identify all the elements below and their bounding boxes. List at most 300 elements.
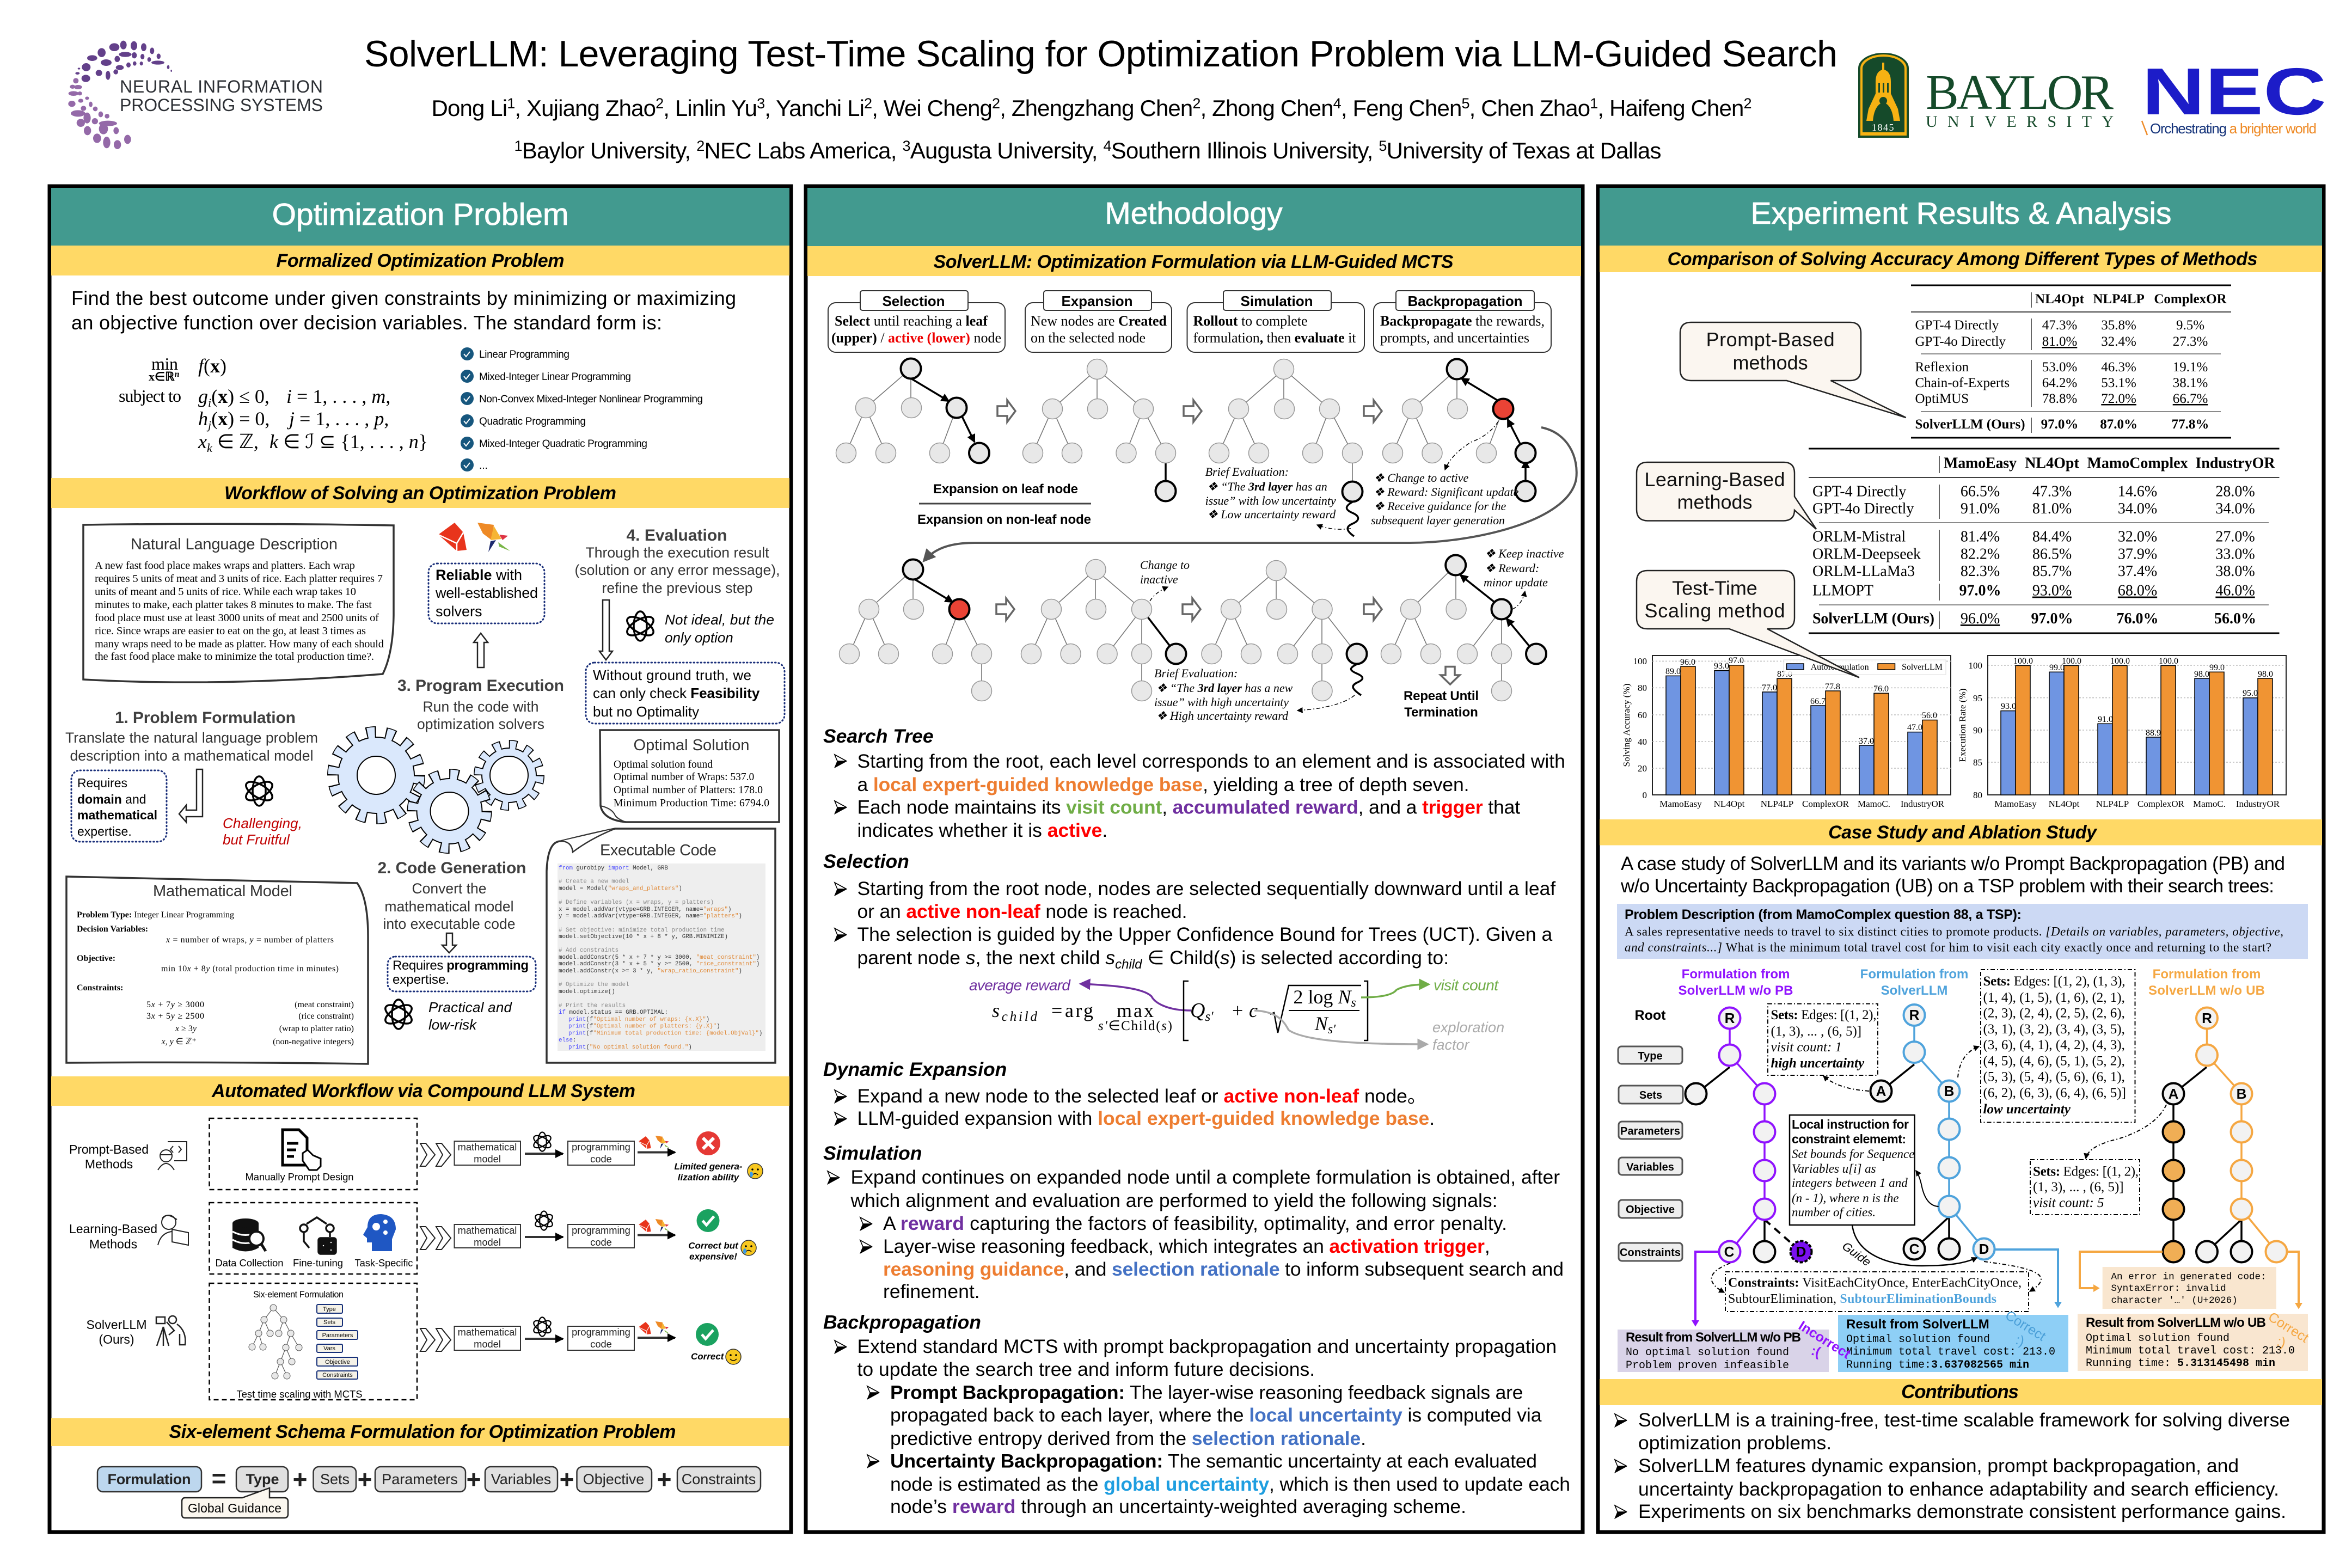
equation: UCT formula: 2 log N xyxy=(1293,986,1351,1008)
step card: simulation: formulation, then evaluate it xyxy=(1193,330,1356,346)
table: learning-based comparison: 34.0% xyxy=(2118,500,2157,517)
natural language box: minutes to make, each platter takes 8 minutes to make. The fast xyxy=(95,599,372,611)
formulation equation: Variables xyxy=(491,1471,551,1487)
mini element list: Sets xyxy=(323,1319,336,1326)
equation: UCT formula: N xyxy=(1315,1013,1328,1034)
table: learning-based comparison: GPT-4 Directly xyxy=(1812,483,1906,500)
table: prompt-based comparison: 35.8% xyxy=(2101,318,2136,333)
step card: expansion: New nodes are Created xyxy=(1031,313,1167,329)
note: challenging: Challenging, xyxy=(223,815,302,831)
authors: 2 xyxy=(656,95,664,112)
authors: Dong Li xyxy=(431,95,507,121)
icon: document hand xyxy=(283,1130,321,1170)
step card: selection xyxy=(828,291,1005,352)
step 4: evaluation: refine the previous step xyxy=(602,580,752,596)
bar chart: solving accuracy: MamoC. xyxy=(1858,799,1890,809)
mathematical model box: x = number of wraps, y = number of platters xyxy=(166,935,334,945)
bar chart: solving accuracy: 66.7 xyxy=(1810,697,1826,706)
authors: 2 xyxy=(1192,95,1200,112)
contributions list: optimization problems. xyxy=(1638,1432,1832,1454)
icon: data collection xyxy=(232,1218,266,1251)
equation: UCT formula: s xyxy=(992,1000,1000,1021)
table: learning-based comparison: 93.0% xyxy=(2032,583,2072,599)
step 4: evaluation: Through the execution result xyxy=(586,544,769,561)
pipeline row 3: code xyxy=(590,1338,612,1350)
authors: 5 xyxy=(1461,95,1469,112)
text: Search Tree xyxy=(823,725,1565,841)
authors: , Wei Cheng xyxy=(872,95,993,121)
mini element list xyxy=(317,1304,358,1379)
optimal solution box: Optimal number of Wraps: 537.0 xyxy=(614,771,754,783)
step 1: problem formulation: Translate the natural language problem xyxy=(65,730,318,746)
text: Dynamic Expansion: Expand a new node to the selected leaf or active non-leaf node。 xyxy=(857,1085,1426,1107)
code listing: # Define variables (x = wraps, y = platters) xyxy=(559,899,714,906)
text: Backpropagation: Backpropagation xyxy=(823,1312,981,1333)
mathematical model box: (non-negative integers) xyxy=(273,1037,354,1046)
authors: , Zhengzhang Chen xyxy=(1000,95,1193,121)
table: learning-based comparison: 47.3% xyxy=(2032,483,2072,500)
bar chart: solving accuracy: Solving Accuracy (%) xyxy=(1621,684,1632,767)
note: sets low uncertainty: (4, 5), (4, 6), (5, 1), (5, 2), xyxy=(1983,1054,2125,1068)
result: w/o UB: Optimal solution found xyxy=(2086,1332,2230,1345)
table: learning-based comparison: 84.4% xyxy=(2032,528,2072,546)
equation: standard form: ∈ ℤ, xyxy=(212,431,259,452)
arrow: code generation down xyxy=(442,933,456,953)
table: learning-based comparison: 34.0% xyxy=(2215,500,2255,517)
section bar: case study: Case Study and Ablation Study xyxy=(1828,822,2098,843)
callout: prompt-based methods: Prompt-Based xyxy=(1706,328,1835,351)
pipeline row 2 xyxy=(420,1209,756,1262)
result: w/o PB: No optimal solution found xyxy=(1626,1346,1789,1359)
table: learning-based comparison: 86.5% xyxy=(2032,546,2072,563)
note: brief evaluation high: ❖ High uncertainty reward xyxy=(1156,709,1289,722)
table: prompt-based comparison: 87.0% xyxy=(2100,417,2137,432)
text: Backpropagation: Prompt Backpropagation: The layer-wise reasoning feedback signals are xyxy=(890,1382,1523,1404)
table: learning-based comparison: 82.2% xyxy=(1961,546,2000,563)
problem description box: A sales representative needs to travel to six distinct cities to promote products. [Details on variables, parameters, objective, xyxy=(1625,924,2283,939)
pipeline row 2: code xyxy=(590,1236,612,1248)
checklist: problem types: Non-Convex Mixed-Integer Nonlinear Programming xyxy=(479,394,703,405)
formulation equation: + xyxy=(358,1465,372,1493)
step card: simulation: Rollout to complete xyxy=(1193,313,1308,329)
note: local instruction: integers between 1 and xyxy=(1792,1176,1908,1190)
note: brief evaluation low: Brief Evaluation: xyxy=(1205,465,1289,479)
text: Search Tree: a local expert-guided knowledge base, yielding a tree of depth seven. xyxy=(857,774,1469,795)
table: prompt-based comparison: 19.1% xyxy=(2173,360,2208,375)
code listing: # Create a new model xyxy=(559,879,629,885)
code listing: model.addConstr(3 * x + 5 * y >= 2500, "rice_constraint") xyxy=(559,961,759,967)
bar chart: execution rate: NL4Opt xyxy=(2049,799,2080,809)
bar chart: execution rate: 98.0 xyxy=(2194,670,2209,679)
label: repeat until termination: Termination xyxy=(1404,705,1478,720)
code listing: print(f"Minimum total production time: {model.ObjVal}") xyxy=(568,1031,762,1037)
note: brief evaluation low: ❖ Low uncertainty reward xyxy=(1207,507,1336,521)
text: Simulation: reasoning guidance, and selection rationale to inform subsequent search and xyxy=(883,1258,1564,1280)
level labels: Sets xyxy=(1639,1089,1662,1101)
section bar: formalized: Formalized Optimization Problem xyxy=(277,250,564,271)
equation: UCT formula: = xyxy=(1051,1000,1062,1021)
equation: UCT formula xyxy=(969,977,1504,1053)
logo: NEC xyxy=(2142,54,2326,137)
checklist: problem types: Mixed-Integer Quadratic Programming xyxy=(479,438,647,450)
note: not ideal: Not ideal, but the xyxy=(665,611,774,628)
title: SolverLLM: Leveraging Test-Time Scaling for Optimization Problem via LLM-Guided Search xyxy=(364,33,1837,75)
logo: NEC: Orchestrating a brighter world xyxy=(2150,120,2317,137)
logo: Baylor: 1845 xyxy=(1872,122,1895,133)
equation: standard form: x∈ℝ xyxy=(149,370,175,383)
note: sets high uncertainty: high uncertainty xyxy=(1771,1056,1865,1070)
code listing: model.optimize() xyxy=(559,989,615,995)
row: learning-based: Data Collection xyxy=(216,1257,283,1269)
note: sets low uncertainty: (3, 6), (4, 1), (4, 2), (4, 3), xyxy=(1983,1038,2125,1052)
stamp: correct blue: Correct xyxy=(2002,1308,2048,1344)
logo: NeurIPS xyxy=(68,41,323,149)
pipeline row 1: mathematical xyxy=(458,1141,517,1153)
tree: SolverLLM: C xyxy=(1909,1241,1920,1257)
table: learning-based comparison: 97.0% xyxy=(1959,583,2001,599)
executable code box: Executable Code xyxy=(600,842,716,859)
tree: second round simulation xyxy=(1202,561,1367,710)
contributions list xyxy=(1615,1409,2290,1522)
callout: feasibility: Without ground truth, we xyxy=(593,667,751,683)
callout: prompt-based methods xyxy=(1680,322,1906,418)
table: learning-based comparison: 81.0% xyxy=(2032,500,2072,517)
label: repeat until termination: Repeat Until xyxy=(1404,689,1479,703)
step card: backpropagation xyxy=(1374,291,1551,352)
note: local instruction: (n - 1), where n is the xyxy=(1792,1191,1899,1205)
panel heading: Experiment Results: Experiment Results & Analysis xyxy=(1751,196,2171,231)
note: change to active: ❖ Change to active xyxy=(1374,471,1469,485)
note: brief evaluation low: issue” with low uncertainty xyxy=(1205,494,1336,507)
table: prompt-based comparison: 97.0% xyxy=(2041,417,2078,432)
bar chart: execution rate: 88.9 xyxy=(2146,728,2161,738)
expansion labels: Expansion on leaf node xyxy=(933,482,1078,497)
table: prompt-based comparison: OptiMUS xyxy=(1915,391,1969,406)
note: sets low uncertainty: (6, 2), (6, 3), (6, 4), (6, 5)] xyxy=(1983,1086,2126,1100)
chart legend: SolverLLM xyxy=(1902,663,1943,672)
note: sets low uncertainty: (3, 1), (3, 2), (3, 4), (3, 5), xyxy=(1983,1022,2125,1037)
affiliations: Southern Illinois University, xyxy=(1111,138,1379,163)
note: brief evaluation high: issue” with high uncertainty xyxy=(1154,695,1289,709)
affiliations: 2 xyxy=(696,138,705,154)
authors: , Linlin Yu xyxy=(663,95,757,121)
section bar: automated workflow xyxy=(51,1076,789,1106)
equation: standard form: i xyxy=(208,396,211,409)
code listing: print("No optimal solution found.") xyxy=(568,1044,692,1051)
equation: standard form: g xyxy=(198,385,208,407)
pipeline row 1 xyxy=(420,1131,763,1183)
callout: learning-based methods: Learning-Based xyxy=(1644,468,1785,491)
authors: 2 xyxy=(992,95,1000,112)
mathematical model box: 5x + 7y ≥ 3000 xyxy=(146,1000,204,1009)
bar chart: execution rate: 85 xyxy=(1973,757,1982,768)
equation: standard form: min xyxy=(151,354,178,373)
authors: , Yanchi Li xyxy=(764,95,865,121)
callout: reliable xyxy=(428,564,544,623)
authors: , Feng Chen xyxy=(1341,95,1462,121)
table: learning-based comparison: IndustryOR xyxy=(2195,455,2275,471)
authors: , Xujiang Zhao xyxy=(514,95,656,121)
optimal solution box: Optimal Solution xyxy=(634,737,749,754)
step 1: problem formulation: 1. Problem Formulation xyxy=(115,709,296,727)
text: Dynamic Expansion xyxy=(823,1058,1435,1129)
arrow: loop back xyxy=(924,427,1577,561)
pipeline row 3: programming xyxy=(572,1326,630,1338)
optimal solution box: Optimal number of Platters: 178.0 xyxy=(614,785,763,796)
table: learning-based comparison: 46.0% xyxy=(2215,583,2255,599)
note: sets high uncertainty: (1, 3), ... , (6, 5)] xyxy=(1771,1024,1861,1039)
arrow: guide xyxy=(1840,1225,1977,1269)
callout: learning-based methods xyxy=(1637,462,1816,529)
intro text: an objective function over decision variables. The standard form is: xyxy=(71,311,662,334)
natural language box xyxy=(83,524,394,682)
section bar: six-element xyxy=(51,1418,789,1446)
row: SolverLLM: Six-element Formulation xyxy=(253,1290,344,1300)
text: Dynamic Expansion: LLM-guided expansion with local expert-guided knowledge base. xyxy=(857,1107,1435,1129)
arrow xyxy=(1184,400,1202,422)
text: Simulation: Simulation xyxy=(823,1142,922,1164)
step card: backpropagation: Backpropagate the rewards, xyxy=(1380,313,1545,329)
table: learning-based comparison: LLMOPT xyxy=(1812,583,1873,599)
callout: global guidance xyxy=(182,1488,288,1518)
text: Simulation: which alignment and evaluation are performed to yield the following signals: xyxy=(850,1190,1497,1211)
note: local instruction xyxy=(1790,1115,1939,1225)
bar chart: execution rate: 100.0 xyxy=(2062,657,2081,666)
optimal solution box: Optimal solution found xyxy=(614,759,713,770)
equation: standard form: k ∈ ℐ ⊆ {1, . . . , n} xyxy=(270,431,428,452)
row: prompt-based xyxy=(69,1118,417,1190)
text: Backpropagation: node’s reward through an uncertainty-weighted averaging scheme. xyxy=(890,1496,1466,1517)
equation: UCT formula: exploration xyxy=(1432,1019,1504,1036)
step 2: code generation: mathematical model xyxy=(384,898,514,915)
table: learning-based comparison: 37.9% xyxy=(2118,546,2157,563)
table: prompt-based comparison: ComplexOR xyxy=(2154,292,2227,307)
tree: SolverLLM xyxy=(1871,1004,1995,1260)
step 2: code generation xyxy=(378,859,526,932)
level labels: Variables xyxy=(1626,1161,1674,1173)
row: learning-based: Task-Specific xyxy=(355,1257,413,1269)
text: Backpropagation: to update the search tree and inform future decisions. xyxy=(857,1358,1315,1380)
callout: reliable: solvers xyxy=(436,603,482,620)
table: learning-based comparison: 33.0% xyxy=(2215,546,2255,563)
logo: Baylor: UNIVERSITY xyxy=(1926,113,2114,131)
note: sets visit count 5: Sets: Edges: [(1, 2), xyxy=(2033,1164,2139,1179)
callout: reliable: Reliable with xyxy=(436,567,522,583)
equation: UCT formula: child xyxy=(1002,1009,1038,1024)
bar chart: solving accuracy: 77.8 xyxy=(1825,682,1840,691)
row: learning-based: Methods xyxy=(89,1237,137,1251)
equation: UCT formula: + xyxy=(1232,1000,1243,1021)
bar chart: execution rate: 99.0 xyxy=(2209,663,2225,672)
tree: w/o PB xyxy=(1686,1007,1812,1262)
tree: SolverLLM: D xyxy=(1979,1241,1989,1257)
note: sets visit count 5: (1, 3), ... , (6, 5)] xyxy=(2033,1180,2124,1195)
note: local instruction: Local instruction for xyxy=(1792,1117,1909,1131)
mathematical model box: 3x + 5y ≥ 2500 xyxy=(146,1012,204,1021)
error box: character '…' (U+2026) xyxy=(2111,1295,2238,1306)
text: Backpropagation: Extend standard MCTS with prompt backpropagation and uncertainty propagation xyxy=(857,1336,1557,1357)
mini search tree xyxy=(249,1304,302,1379)
row: learning-based: Learning-Based xyxy=(69,1222,157,1236)
note: challenging: but Fruitful xyxy=(223,831,290,848)
natural language box: A new fast food place makes wraps and platters. Each wrap xyxy=(95,560,355,572)
authors: , Chen Zhao xyxy=(1469,95,1590,121)
formulation equation: + xyxy=(467,1465,481,1493)
icon: GPT xyxy=(383,1000,414,1029)
text: Selection: parent node s, the next child s xyxy=(857,947,1115,969)
bar chart: solving accuracy: 80 xyxy=(1638,683,1647,693)
code listing: print(f"Optimal number of wraps: {x.X}") xyxy=(568,1016,709,1023)
section bar: workflow xyxy=(51,478,789,508)
equation: standard form: h xyxy=(198,408,208,430)
optimal solution box: Minimum Production Time: 6794.0 xyxy=(614,798,769,809)
table: prompt-based comparison: 46.3% xyxy=(2101,360,2136,375)
panel heading: Optimization Problem: Optimization Problem xyxy=(272,197,568,232)
tree: w/o PB: D xyxy=(1796,1244,1806,1260)
logo: NEC: NEC xyxy=(2142,54,2326,128)
bar chart: solving accuracy: 77.0 xyxy=(1762,683,1777,693)
pipeline row 2: mathematical xyxy=(458,1224,517,1236)
panel: Methodology xyxy=(806,186,1583,1532)
pipeline row 2: programming xyxy=(572,1224,630,1236)
callout: programming: expertise. xyxy=(393,972,449,987)
arrow: guide: Guide xyxy=(1840,1239,1873,1269)
bar chart: solving accuracy: 93.0 xyxy=(1714,661,1729,671)
callout: programming: Requires programming xyxy=(393,958,529,973)
note: change to active: ❖ Reward: Significant update xyxy=(1374,485,1519,499)
bar chart: execution rate: 100.0 xyxy=(2013,657,2033,666)
tree: w/o UB: R xyxy=(2202,1010,2212,1026)
tree: simulation xyxy=(1209,359,1362,536)
stamp: correct orange: Correct xyxy=(2265,1309,2311,1346)
result: w/o UB: Result from SolverLLM w/o UB xyxy=(2086,1315,2266,1330)
note: sets high uncertainty xyxy=(1768,1004,1878,1091)
text: Selection: Starting from the root node, nodes are selected sequentially downward until a leaf xyxy=(857,878,1555,899)
equation: standard form: j xyxy=(206,418,211,432)
note: not ideal xyxy=(665,611,774,646)
bar chart: execution rate: NLP4LP xyxy=(2096,799,2129,809)
formulation equation: Sets xyxy=(320,1471,350,1487)
table: prompt-based comparison: 9.5% xyxy=(2176,318,2204,333)
note: practical xyxy=(428,999,513,1033)
step 3: program execution: optimization solvers xyxy=(417,716,544,732)
bar chart: solving accuracy: 97.0 xyxy=(1729,656,1744,665)
callout: learning-based methods: methods xyxy=(1677,491,1753,513)
checklist: problem types xyxy=(461,347,703,471)
tree: expansion xyxy=(1022,359,1176,501)
problem description box: and constraints...] What is the minimum total travel cost for him to visit each city exactly once and returning to the start? xyxy=(1625,941,2271,954)
step 3: program execution xyxy=(397,677,564,732)
note: not ideal: only option xyxy=(665,629,733,646)
code listing: # Print the results xyxy=(559,1003,626,1009)
bar chart: solving accuracy: 56.0 xyxy=(1922,711,1937,720)
row: prompt-based: Methods xyxy=(85,1157,133,1171)
mathematical model box: min 10x + 8y (total production time in minutes) xyxy=(161,964,339,973)
bar chart: execution rate: 100.0 xyxy=(2159,657,2178,666)
bar chart: execution rate: 93.0 xyxy=(2001,702,2016,711)
tree headings: Formulation from xyxy=(2153,967,2261,982)
contributions list: Experiments on six benchmarks demonstrate consistent performance gains. xyxy=(1638,1500,2286,1522)
table: prompt-based comparison: 27.3% xyxy=(2173,334,2208,349)
chart legend xyxy=(1784,660,1946,675)
pipeline row 1: Limited genera- xyxy=(674,1161,743,1172)
section bar: SolverLLM xyxy=(807,246,1581,276)
result: SolverLLM: Optimal solution found xyxy=(1846,1333,1990,1346)
bar chart: solving accuracy: 87.0 xyxy=(1777,670,1792,679)
tree: w/o UB: B xyxy=(2237,1086,2246,1102)
row: SolverLLM: SolverLLM xyxy=(86,1318,147,1332)
callout: requires domain: domain and xyxy=(77,792,146,806)
step 2: code generation: Convert the xyxy=(412,880,487,897)
table: learning-based comparison: NL4Opt xyxy=(2025,455,2079,471)
icons: solvers xyxy=(438,523,510,552)
result: SolverLLM xyxy=(1838,1315,2068,1372)
contributions list: SolverLLM is a training-free, test-time scalable framework for solving diverse xyxy=(1638,1409,2290,1431)
table: learning-based comparison: 38.0% xyxy=(2215,563,2255,580)
step card: simulation: Simulation xyxy=(1240,293,1313,309)
mathematical model box: Mathematical Model xyxy=(153,883,292,900)
icon: GPT xyxy=(243,776,275,806)
authors: 2 xyxy=(1743,95,1752,112)
callout: requires domain: expertise. xyxy=(77,824,132,838)
table: prompt-based comparison: 32.4% xyxy=(2101,334,2136,349)
section bar: formalized xyxy=(51,246,789,275)
table: prompt-based comparison: GPT-4 Directly xyxy=(1915,318,1999,333)
mathematical model box: Decision Variables: xyxy=(77,924,148,934)
tree: SolverLLM: A xyxy=(1876,1083,1886,1099)
arrow xyxy=(997,400,1015,422)
code listing: model.addConstr(x >= 3 * y, "wrap_ratio_constraint") xyxy=(559,968,742,975)
step card: selection: (upper) / active (lower) node xyxy=(831,330,1001,346)
table: learning-based comparison: ORLM-Mistral xyxy=(1812,528,1906,546)
note: keep inactive: ❖ Reward: xyxy=(1485,561,1539,575)
note: sets low uncertainty: Sets: Edges: [(1, 2), (1, 3), xyxy=(1983,974,2126,989)
callout: feasibility xyxy=(586,663,785,724)
pipeline row 3 xyxy=(420,1317,741,1364)
equation: standard form: ( xyxy=(211,408,218,430)
table: prompt-based comparison: Reflexion xyxy=(1915,360,1969,375)
table: learning-based comparison: 97.0% xyxy=(2031,610,2073,627)
tree headings: SolverLLM w/o UB xyxy=(2148,983,2265,998)
label: repeat until termination xyxy=(1404,689,1479,720)
panel: Experiment Results xyxy=(1598,186,2324,1532)
executable code box xyxy=(547,829,775,1063)
expansion labels xyxy=(917,482,1091,527)
note: change to active: ❖ Receive guidance for the xyxy=(1374,499,1506,513)
pipeline row 1: lization ability xyxy=(678,1172,740,1183)
bar chart: solving accuracy: 37.0 xyxy=(1859,737,1874,746)
table: learning-based comparison: MamoComplex xyxy=(2087,455,2188,471)
logo: Baylor xyxy=(1858,53,2114,138)
bar chart: solving accuracy: 89.0 xyxy=(1665,667,1681,676)
note: keep inactive: minor update xyxy=(1484,575,1548,589)
affiliations: University of Texas at Dallas xyxy=(1387,138,1662,163)
row: learning-based xyxy=(69,1203,417,1274)
tree: SolverLLM: R xyxy=(1909,1007,1920,1023)
table: learning-based comparison: SolverLLM (Ours) xyxy=(1812,610,1934,627)
note: brief evaluation high xyxy=(1154,666,1293,722)
stamp: incorrect: :( xyxy=(1809,1343,1822,1360)
equation: UCT formula: visit count xyxy=(1434,977,1499,994)
row: SolverLLM xyxy=(86,1283,417,1400)
table: prompt-based comparison: 53.0% xyxy=(2042,360,2077,375)
formulation equation: + xyxy=(293,1465,307,1493)
natural language box: rice. Since wraps are easier to eat on the go, at least 3 times as xyxy=(95,625,366,637)
tree headings: Formulation from xyxy=(1682,967,1790,982)
note: brief evaluation low xyxy=(1205,465,1336,521)
arrow xyxy=(996,598,1014,620)
formulation equation: Type xyxy=(246,1471,279,1487)
